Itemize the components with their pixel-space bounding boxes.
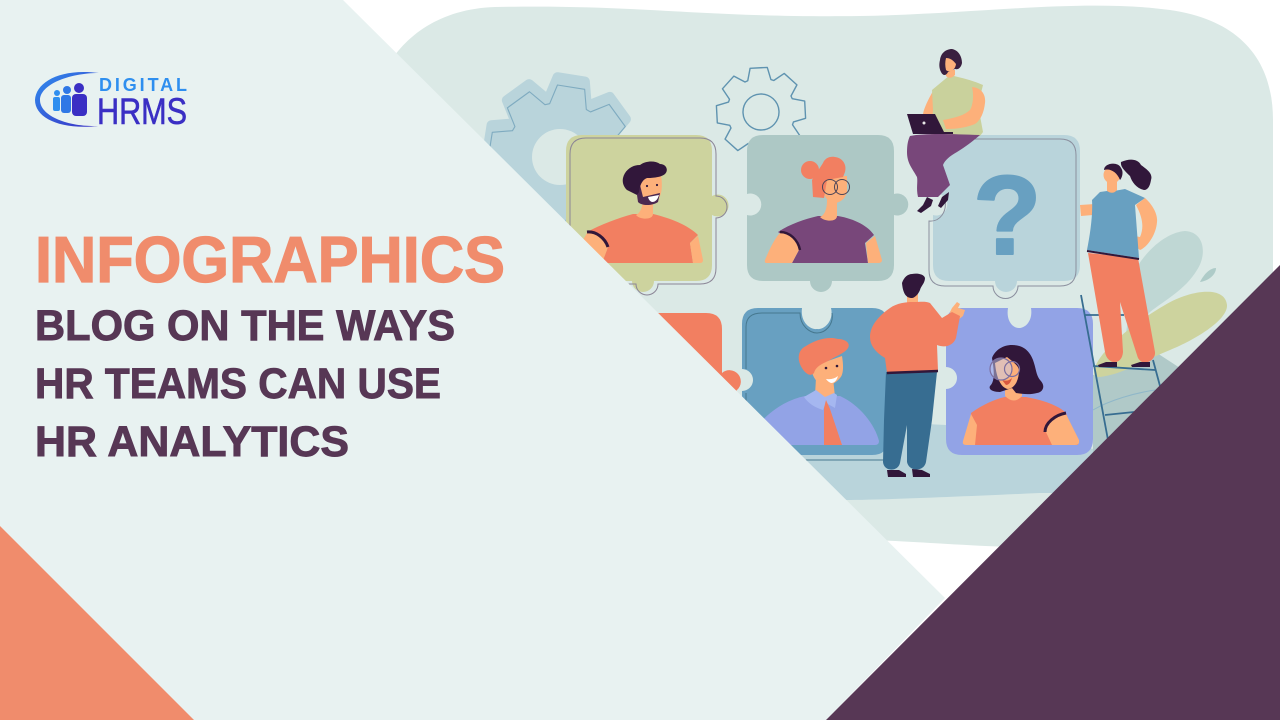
woman standing with ponytail [1080, 160, 1157, 367]
woman sitting with laptop [907, 49, 985, 213]
large gear [478, 68, 642, 238]
woman portrait in periwinkle puzzle [963, 345, 1079, 445]
ladder [1081, 295, 1160, 440]
leaves [1093, 231, 1227, 410]
logo: HRMS [97, 91, 187, 132]
diagonal light panel [0, 0, 945, 720]
subtitle: HR ANALYTICS [35, 418, 349, 466]
puzzle: teal with woman [747, 135, 908, 292]
logo people [53, 83, 87, 116]
subtitle: HR TEAMS CAN USE [35, 360, 441, 408]
puzzle: periwinkle with woman [946, 308, 1093, 455]
title: INFOGRAPHICS [35, 223, 505, 296]
puzzle: green with man [566, 135, 729, 295]
background blob [385, 6, 1273, 548]
man standing pointing [870, 274, 965, 477]
man portrait in green puzzle [583, 161, 703, 263]
floor shape [740, 424, 1150, 500]
corner triangle purple [826, 265, 1280, 720]
puzzle: blue with man [742, 308, 888, 460]
subtitle [35, 302, 455, 466]
subtitle: BLOG ON THE WAYS [35, 302, 455, 350]
logo arc [35, 72, 99, 127]
puzzle: question mark [929, 135, 1080, 298]
question mark glyph: ? [973, 153, 1041, 278]
puzzle: orange partial [620, 313, 741, 410]
woman portrait in teal puzzle [765, 157, 882, 263]
corner triangle orange [0, 526, 194, 720]
logo wordmark: DIGITAL [99, 75, 187, 95]
man portrait in blue puzzle [745, 338, 879, 445]
small outline gear [715, 66, 807, 158]
logo [35, 72, 187, 132]
floor shade by ladder [1093, 353, 1180, 460]
